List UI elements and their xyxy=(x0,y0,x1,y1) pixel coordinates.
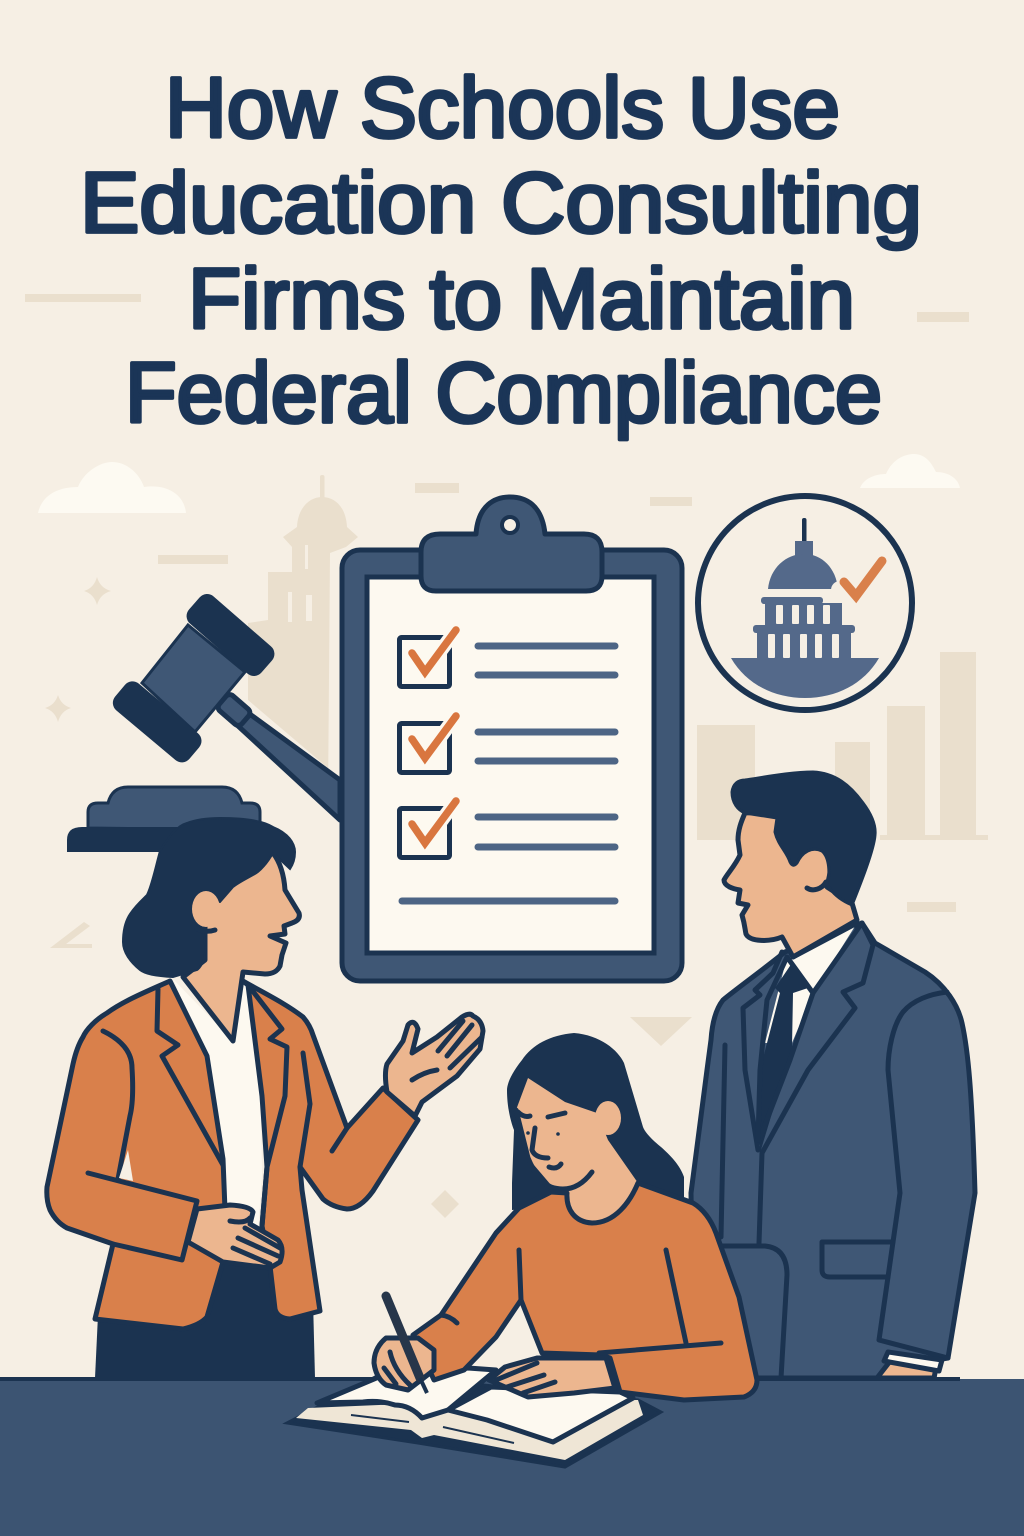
woman jacket lines xyxy=(103,985,347,1226)
man jacket xyxy=(691,923,975,1378)
pen xyxy=(386,1296,427,1393)
title: How Schools Use xyxy=(165,61,840,156)
checklist row 2 xyxy=(400,716,615,772)
title: Federal Compliance xyxy=(125,346,882,441)
book right page xyxy=(448,1387,633,1442)
clipboard xyxy=(342,497,682,981)
woman right hand xyxy=(386,1014,483,1116)
icon: capitol with checkmark xyxy=(698,496,912,710)
title: Education Consulting xyxy=(80,156,922,251)
open book xyxy=(287,1368,661,1467)
student writing xyxy=(374,1033,757,1400)
student left hand xyxy=(374,1338,434,1390)
woman jacket xyxy=(47,981,225,1329)
title xyxy=(80,61,922,441)
woman left sleeve xyxy=(88,1173,197,1260)
woman face and neck xyxy=(183,853,299,1041)
woman torso gap xyxy=(119,1150,133,1181)
man tie xyxy=(760,963,808,1153)
background clouds xyxy=(38,454,960,513)
student right hand xyxy=(489,1358,615,1397)
table xyxy=(0,1377,1024,1536)
man neck and face xyxy=(724,810,857,957)
woman ear xyxy=(192,891,220,931)
woman skirt xyxy=(95,1250,315,1378)
student face and neck xyxy=(516,1078,638,1225)
student sweater lines xyxy=(441,1250,721,1353)
clipboard board xyxy=(342,550,682,981)
checklist row 1 xyxy=(400,630,615,686)
man in suit xyxy=(691,772,975,1378)
clipboard clip xyxy=(421,497,602,591)
woman left hand xyxy=(188,1205,282,1268)
title: Firms to Maintain xyxy=(188,252,855,347)
student face details xyxy=(516,1110,592,1189)
gavel base behind head xyxy=(67,787,260,852)
student hair xyxy=(507,1033,684,1210)
man cuff and hand xyxy=(877,1352,942,1378)
woman jacket right panel and arm xyxy=(243,981,418,1319)
man hair xyxy=(732,772,875,905)
checklist row 3 xyxy=(400,801,615,858)
background bar chart xyxy=(697,652,988,840)
man suit lines xyxy=(721,923,948,1358)
student sweater xyxy=(413,1183,757,1400)
clipboard paper xyxy=(367,577,654,953)
icon: gavel xyxy=(109,590,340,820)
background decoration xyxy=(25,294,969,1218)
book left page xyxy=(317,1368,496,1418)
book page edges xyxy=(296,1400,643,1460)
chair back xyxy=(721,1246,787,1378)
background building silhouette xyxy=(248,475,358,800)
student ear xyxy=(595,1101,621,1135)
man ear line xyxy=(807,882,826,890)
woman shirt xyxy=(173,974,262,1232)
checklist bottom line xyxy=(402,898,615,904)
woman hair xyxy=(123,818,295,977)
woman standing xyxy=(47,787,483,1378)
man pocket xyxy=(822,1242,893,1277)
man shirt xyxy=(765,923,857,1043)
